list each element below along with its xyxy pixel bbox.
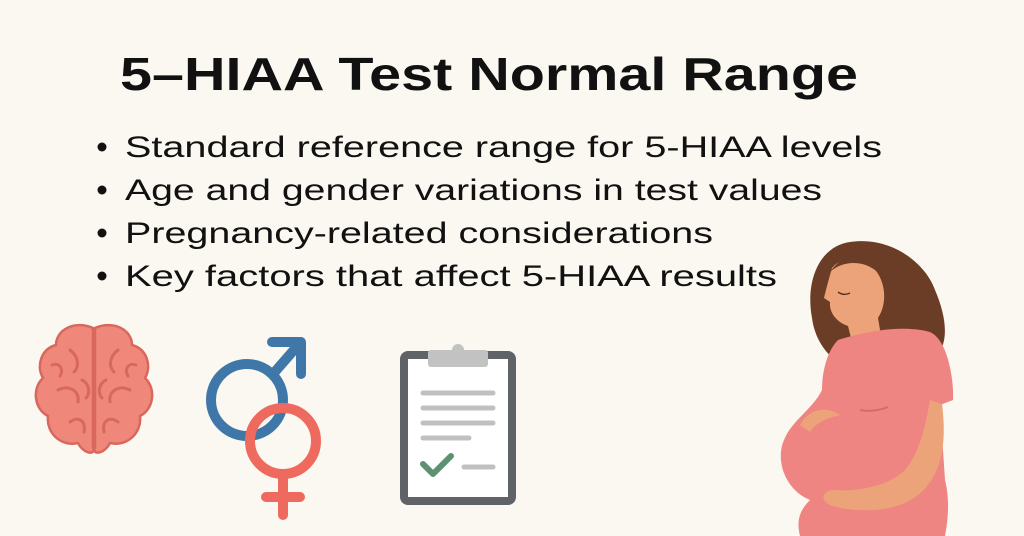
bullet list: Age and gender variations in test values <box>125 174 822 207</box>
icon: clipboard <box>404 344 512 501</box>
bullet list <box>98 131 882 293</box>
title: 5–HIAA Test Normal Range <box>120 48 858 100</box>
icon: gender symbols <box>211 342 316 515</box>
icon: brain <box>36 325 152 453</box>
bullet list: Pregnancy-related considerations <box>125 217 713 250</box>
illustration: pregnant woman <box>781 241 953 536</box>
bullet list: Standard reference range for 5-HIAA levels <box>125 131 882 164</box>
bullet list: Key factors that affect 5-HIAA results <box>125 260 777 293</box>
